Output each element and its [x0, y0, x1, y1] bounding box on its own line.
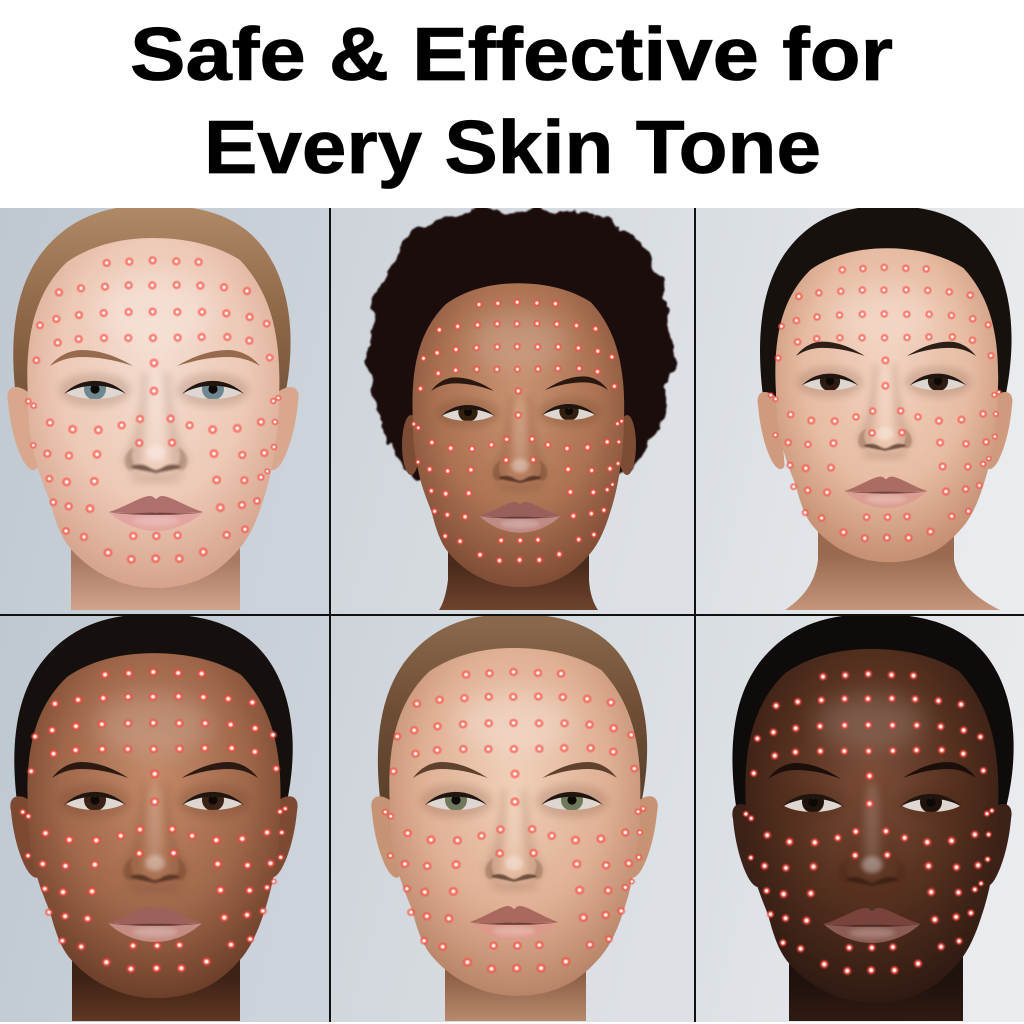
nose: [123, 783, 187, 893]
neck: [445, 930, 586, 1021]
eyes: [59, 373, 249, 407]
eyes: [436, 397, 601, 428]
title: [130, 12, 893, 189]
LED dots: [742, 669, 995, 976]
panel: light skin, blonde hair: [0, 208, 329, 614]
LED dots: [411, 298, 625, 565]
title: Every Skin Tone: [204, 105, 821, 189]
hair: [13, 205, 291, 405]
nose: [857, 365, 913, 460]
eyebrows: [50, 350, 260, 366]
nose: [838, 780, 906, 896]
face: [389, 648, 640, 996]
eyebrows: [413, 762, 617, 778]
eyebrows: [431, 376, 608, 391]
lips: [469, 906, 559, 941]
ears: [10, 796, 298, 878]
forehead highlight: [94, 693, 214, 757]
ears: [758, 392, 1012, 469]
lips: [479, 502, 561, 533]
eyebrows: [52, 762, 258, 778]
hair: [732, 614, 1014, 808]
afro hair: [367, 208, 672, 478]
panel: deep skin, afro hair: [331, 208, 694, 614]
ears: [732, 804, 1012, 887]
forehead highlight: [816, 694, 926, 750]
ears: [7, 387, 299, 470]
panel: medium-deep skin, black hair: [0, 616, 329, 1022]
eyes: [797, 366, 971, 398]
neck: [789, 940, 963, 1021]
eyes: [420, 784, 608, 818]
face: [412, 283, 624, 587]
lips: [844, 477, 928, 508]
title: Safe & Effective for: [130, 12, 893, 96]
lips: [108, 496, 204, 531]
face: [745, 649, 998, 1003]
lips: [107, 907, 203, 942]
nose: [124, 373, 188, 483]
LED dots: [24, 255, 282, 565]
face: [27, 653, 281, 998]
hair: [760, 206, 1012, 400]
nose: [492, 396, 548, 492]
hair part: [512, 616, 516, 652]
hair: [14, 614, 293, 810]
panel: medium skin, brown hair: [331, 616, 694, 1022]
neck: [785, 500, 1000, 610]
neck: [71, 520, 240, 610]
face: [27, 238, 279, 588]
ears: [402, 415, 636, 475]
lips: [823, 908, 921, 943]
hair part: [870, 616, 872, 650]
LED dots: [19, 667, 289, 974]
eyes: [777, 786, 967, 820]
LED dots: [767, 263, 1002, 543]
forehead highlight: [454, 690, 574, 754]
neck: [439, 520, 598, 610]
nose: [484, 790, 544, 891]
eyes: [59, 784, 249, 818]
eyebrows: [768, 762, 976, 779]
hair: [378, 614, 647, 810]
panel: light skin, black hair: [696, 208, 1024, 614]
panel: dark skin, black hair: [696, 616, 1024, 1022]
neck: [72, 930, 240, 1021]
LED dots: [381, 667, 647, 974]
hair part: [152, 616, 156, 655]
ears: [371, 796, 658, 878]
forehead highlight: [469, 312, 569, 372]
forehead highlight: [830, 285, 940, 345]
forehead highlight: [95, 272, 215, 348]
eyebrows: [796, 342, 976, 356]
face: [775, 248, 998, 562]
